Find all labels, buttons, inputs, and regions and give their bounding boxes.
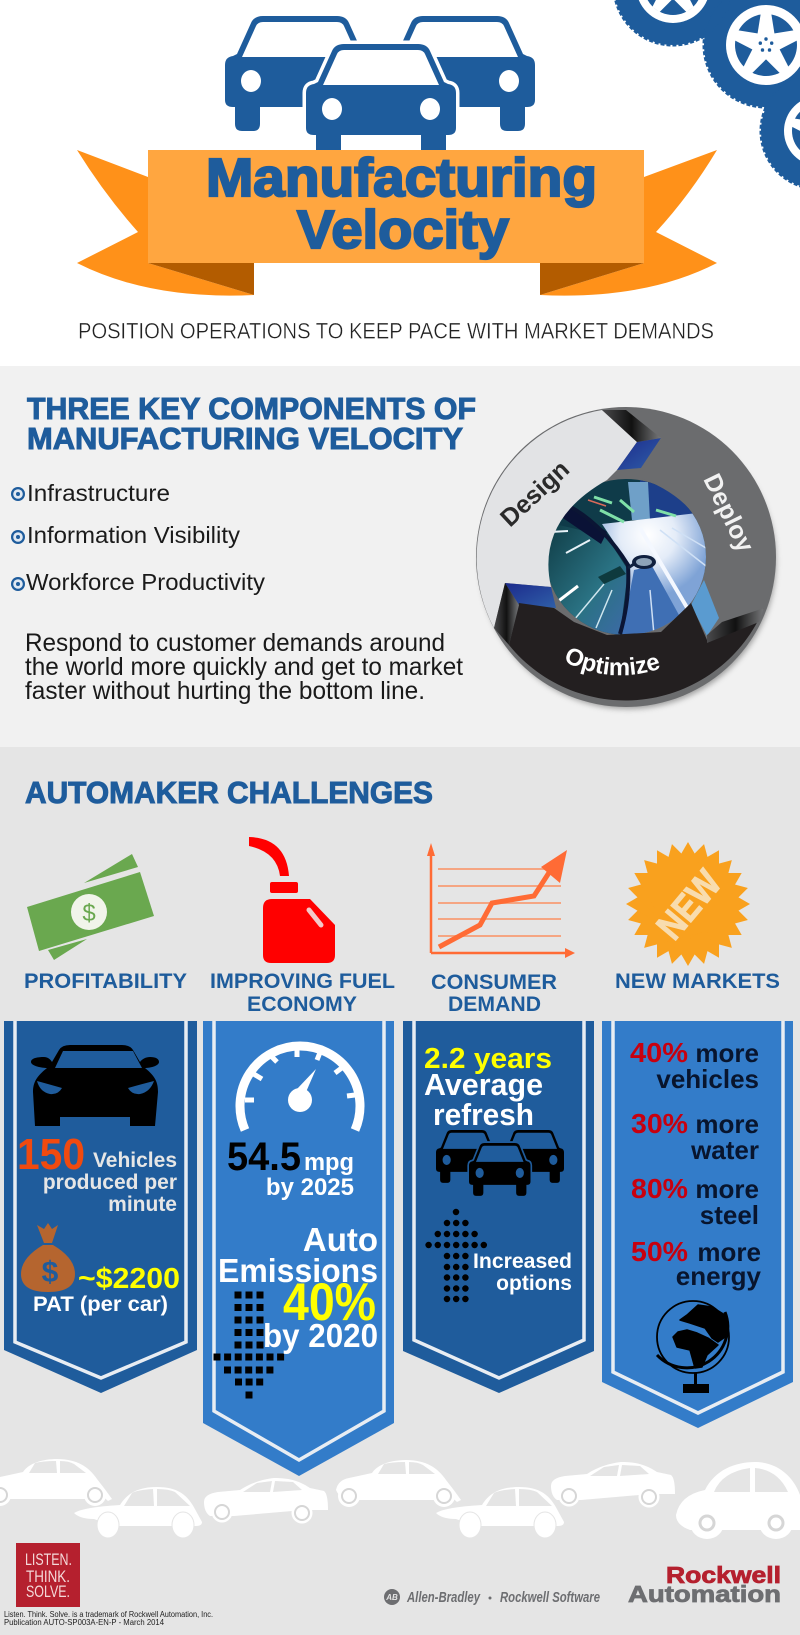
icon: dotted up arrow bbox=[429, 1212, 484, 1299]
icon: money bag bbox=[21, 1223, 75, 1292]
stat list: resources: more bbox=[697, 1237, 761, 1267]
logo: rockwell automation: Rockwell bbox=[666, 1562, 781, 1588]
icon: black car bbox=[31, 1045, 159, 1126]
list: components: Workforce Productivity bbox=[26, 569, 265, 595]
stat: mpg: by 2025 bbox=[266, 1174, 354, 1201]
stat list: resources: vehicles bbox=[656, 1064, 759, 1094]
icon: gauge bbox=[240, 1046, 360, 1130]
challenge labels: NEW MARKETS bbox=[615, 970, 780, 993]
challenge labels bbox=[24, 970, 780, 1016]
icon: fuel can bbox=[249, 837, 335, 963]
stat: auto emissions bbox=[218, 1221, 378, 1332]
white car silhouettes bbox=[0, 1459, 800, 1539]
list: components: Information Visibility bbox=[27, 522, 240, 548]
subtitle: POSITION OPERATIONS TO KEEP PACE WITH MARKET DEMANDS bbox=[78, 318, 714, 344]
list: components bbox=[11, 480, 265, 595]
cycle disk: design deploy optimize: Deploy bbox=[698, 469, 759, 557]
icon: new badge bbox=[626, 822, 770, 972]
heading: three key components bbox=[27, 392, 476, 456]
paragraph: faster without hurting the bottom line. bbox=[25, 677, 425, 705]
stat: profit per car: PAT (per car) bbox=[33, 1293, 168, 1316]
stat list: resources: more bbox=[695, 1109, 759, 1139]
logo: listen think solve: THINK. bbox=[26, 1568, 70, 1586]
stat: 150 vehicles: minute bbox=[108, 1193, 177, 1216]
cycle disk: design deploy optimize: Design bbox=[495, 455, 575, 532]
logo: rockwell automation bbox=[628, 1562, 781, 1607]
brands: allen-bradley and rockwell software bbox=[384, 1589, 600, 1606]
panel: fuel economy bbox=[203, 1021, 394, 1476]
icon: dotted down arrow bbox=[214, 1292, 285, 1398]
challenge labels: ECONOMY bbox=[247, 993, 357, 1016]
heading: automaker challenges: AUTOMAKER CHALLENGES bbox=[25, 775, 433, 810]
stat: 150 vehicles: produced per bbox=[43, 1171, 177, 1194]
logo: listen think solve: LISTEN. bbox=[25, 1551, 72, 1569]
stat: average refresh bbox=[424, 1043, 552, 1132]
icon: money bag: $ bbox=[42, 1256, 59, 1289]
stat: average refresh: refresh bbox=[433, 1097, 534, 1132]
panel: consumer demand bbox=[403, 1021, 594, 1393]
icon: tires bbox=[614, 0, 800, 190]
challenge labels: PROFITABILITY bbox=[24, 970, 187, 993]
stat: average refresh: Average bbox=[424, 1067, 543, 1102]
challenge labels: DEMAND bbox=[448, 993, 541, 1016]
logo: listen think solve bbox=[16, 1543, 80, 1607]
icon: three blue cars bbox=[225, 16, 535, 159]
ribbon banner bbox=[77, 150, 717, 296]
stat: average refresh: 2.2 years bbox=[424, 1043, 552, 1075]
paragraph: Respond to customer demands around bbox=[25, 629, 445, 657]
stat: increased options: options bbox=[496, 1272, 572, 1295]
stat: mpg: mpg bbox=[304, 1149, 354, 1176]
paragraph bbox=[25, 629, 463, 705]
photo: car at speed bbox=[546, 479, 706, 635]
stat: increased options bbox=[473, 1250, 572, 1295]
stat list: resources: 40% bbox=[630, 1037, 688, 1068]
stat: by 2020: by 2020 bbox=[263, 1317, 378, 1354]
stat: profit per car: ~$2200 bbox=[78, 1263, 180, 1295]
stat: auto emissions: Auto bbox=[303, 1221, 378, 1258]
footnote: Listen. Think. Solve. is a trademark of Rockwell Automation, Inc. bbox=[4, 1610, 213, 1619]
footnote: Publication AUTO-SP003A-EN-P - March 2014 bbox=[4, 1618, 165, 1627]
stat list: resources: 30% bbox=[631, 1108, 688, 1139]
panel: new markets bbox=[602, 1021, 793, 1428]
stat: profit per car bbox=[33, 1263, 180, 1316]
icon: three black cars bbox=[436, 1130, 564, 1196]
list: components: Infrastructure bbox=[27, 480, 170, 506]
challenge labels: IMPROVING FUEL bbox=[210, 970, 395, 993]
logo: rockwell automation: Automation bbox=[628, 1581, 781, 1607]
challenge labels: CONSUMER bbox=[431, 971, 557, 994]
stat list: resources: 80% bbox=[631, 1173, 688, 1204]
icon: new badge: NEW bbox=[649, 863, 730, 948]
heading: three key components: MANUFACTURING VELOCITY bbox=[27, 422, 463, 456]
title bbox=[206, 148, 597, 260]
paragraph: the world more quickly and get to market bbox=[25, 653, 463, 681]
heading: three key components: THREE KEY COMPONENTS OF bbox=[27, 392, 476, 426]
icon: demand chart bbox=[427, 843, 575, 958]
stat list: resources: more bbox=[695, 1174, 759, 1204]
stat: mpg bbox=[227, 1135, 354, 1201]
cycle disk: design deploy optimize bbox=[476, 407, 780, 712]
icon: steering wheel bullet bbox=[11, 577, 25, 591]
stat: auto emissions: 40% bbox=[283, 1273, 376, 1332]
title: Velocity bbox=[297, 200, 509, 260]
icon: money bbox=[27, 854, 154, 960]
brands: allen-bradley and rockwell software: Rockwell Software bbox=[500, 1589, 600, 1606]
stat: 150 vehicles: 150 bbox=[17, 1130, 85, 1179]
stat list: resources bbox=[630, 1037, 762, 1291]
footnote bbox=[4, 1610, 213, 1627]
icon: steering wheel bullet bbox=[11, 487, 25, 501]
stat list: resources: 50% bbox=[631, 1236, 688, 1267]
brands: allen-bradley and rockwell software: AB bbox=[385, 1593, 398, 1602]
stat: auto emissions: Emissions bbox=[218, 1252, 378, 1289]
stat list: resources: steel bbox=[700, 1200, 759, 1230]
stat list: resources: water bbox=[690, 1135, 759, 1165]
stat list: resources: energy bbox=[676, 1261, 762, 1291]
stat: mpg: 54.5 bbox=[227, 1135, 301, 1179]
stat: 150 vehicles: Vehicles bbox=[93, 1149, 177, 1172]
brands: allen-bradley and rockwell software: Allen-Bradley bbox=[406, 1589, 480, 1606]
stat list: resources: more bbox=[695, 1038, 759, 1068]
icon: globe bbox=[657, 1301, 729, 1393]
stat: increased options: Increased bbox=[473, 1250, 572, 1273]
stat: 150 vehicles bbox=[17, 1130, 177, 1216]
icon: steering wheel bullet bbox=[11, 530, 25, 544]
title: Manufacturing bbox=[206, 148, 597, 208]
icon: money: $ bbox=[82, 900, 96, 927]
cycle disk: design deploy optimize: Optimize bbox=[566, 648, 660, 676]
panel: profitability bbox=[4, 1021, 197, 1393]
logo: listen think solve: SOLVE. bbox=[26, 1583, 70, 1601]
